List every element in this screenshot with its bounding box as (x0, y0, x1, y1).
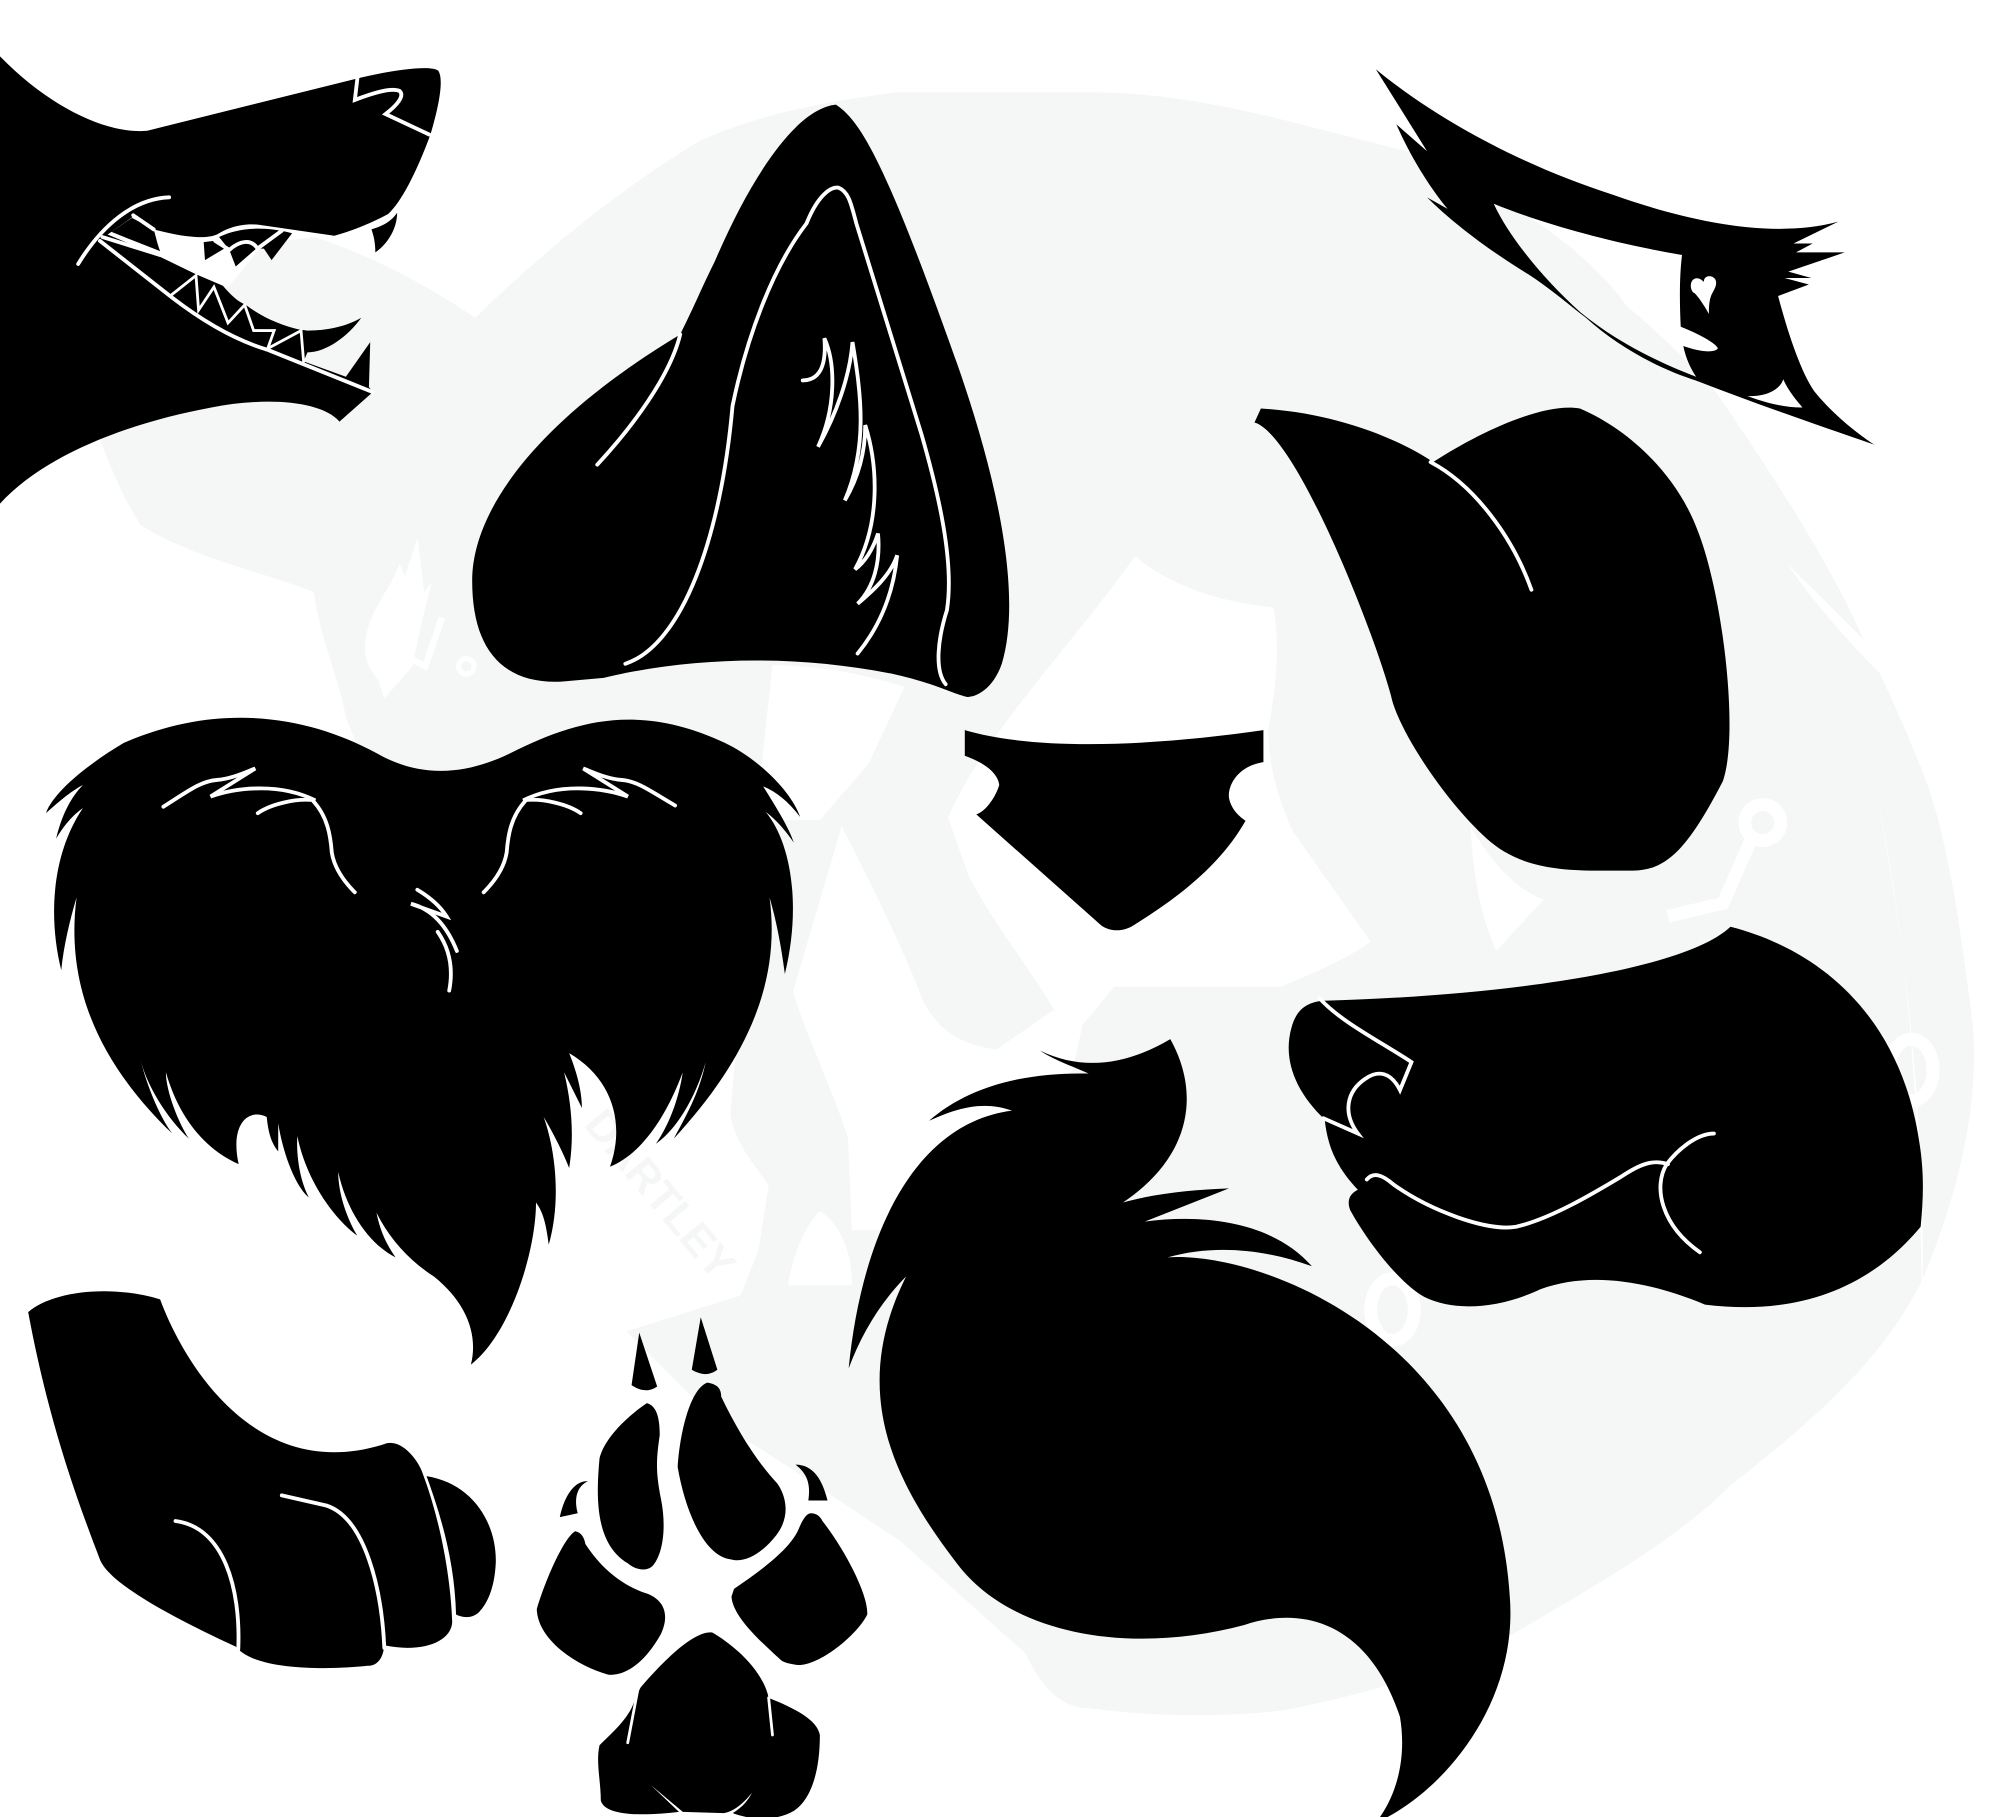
cheek arc (1660, 1134, 1714, 1252)
mouth line (1367, 1162, 1668, 1227)
toe lines (176, 1521, 239, 1649)
outer toe (427, 1476, 496, 1617)
paw print (537, 1317, 867, 1817)
claw 2 (692, 1317, 717, 1374)
toe 3 (537, 1531, 665, 1675)
ghost key ring (389, 618, 1933, 1340)
upper teeth (204, 229, 292, 267)
foreleg paw (28, 1291, 496, 1668)
ear inner lines (597, 334, 680, 465)
ghost gap: small shapes (756, 665, 904, 820)
bandana (965, 730, 1263, 930)
main pad (598, 1632, 820, 1817)
side fang (372, 213, 397, 252)
upper gum tooth (111, 218, 160, 251)
right ear (1254, 408, 1730, 871)
large ear (472, 105, 1009, 697)
center tuft lines (411, 890, 457, 991)
toe 4 (731, 1513, 867, 1665)
small claw left (560, 1481, 588, 1517)
nose line (1320, 998, 1411, 1134)
right brow lines (484, 768, 675, 892)
eye highlight heart (1691, 276, 1716, 314)
ghost gap: right of leg (948, 556, 1371, 1025)
eye (1376, 69, 1874, 445)
toe 1 (598, 1403, 664, 1570)
wolf head snarling (0, 56, 441, 504)
watermark text: DARTLEY (575, 1101, 744, 1289)
mouth lines (78, 197, 169, 264)
snout (1289, 927, 1923, 1307)
chest fur (46, 718, 800, 1365)
nose line (355, 78, 429, 135)
small claw right (796, 1465, 828, 1500)
ghost gap: between legs (793, 826, 1117, 1230)
tail (849, 1039, 1510, 1817)
pad lines (628, 1689, 772, 1743)
toe 2 (678, 1383, 786, 1560)
left brow lines (163, 768, 355, 892)
ear crease line (1431, 462, 1531, 590)
claw 1 (632, 1333, 657, 1390)
